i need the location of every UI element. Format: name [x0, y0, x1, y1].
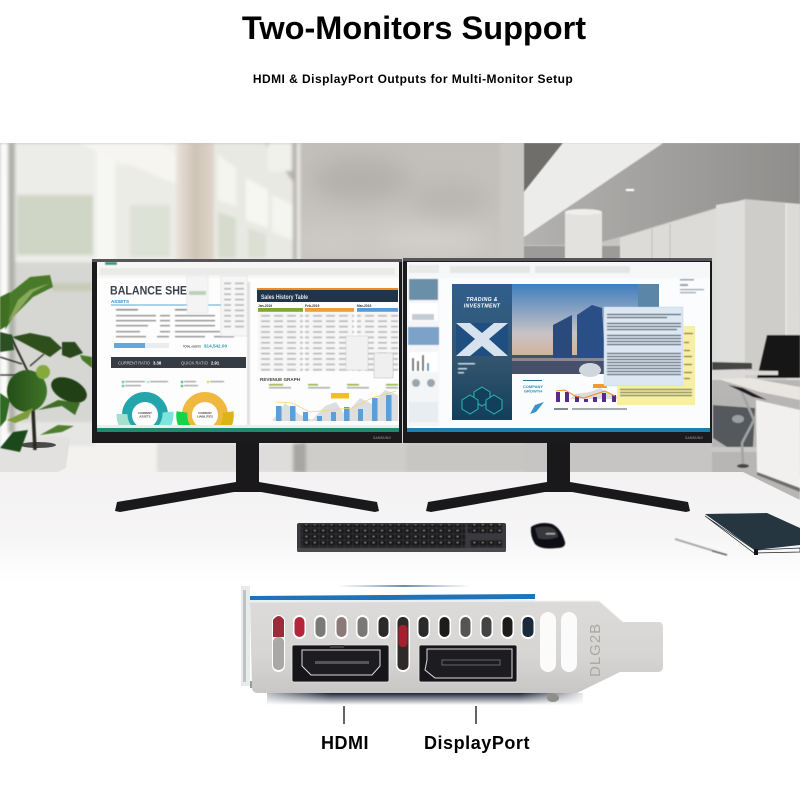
current liabilities donut: CURRENT	[198, 411, 212, 415]
current assets donut: CURRENT	[138, 411, 152, 415]
balance sheet	[110, 276, 247, 433]
current liabilities donut	[182, 397, 228, 433]
assets label: ASSETS	[111, 299, 129, 304]
back wall	[0, 143, 800, 478]
cabinets	[620, 200, 800, 400]
slide title: TRADING &	[466, 297, 498, 303]
current assets donut	[122, 397, 168, 433]
revenue labels	[269, 384, 398, 388]
company growth heading: COMPANY	[523, 384, 543, 389]
open bracket slots	[540, 612, 577, 672]
main slide: INVESTMENT	[464, 304, 501, 310]
grey desk	[712, 362, 752, 370]
city skyline photo	[512, 284, 659, 377]
balance sheet: QUICK RATIO	[181, 360, 209, 365]
bracket shadow	[267, 693, 583, 705]
sales history sheet	[257, 288, 398, 421]
cylinder column	[565, 212, 602, 260]
monitor stand right	[426, 442, 690, 512]
low ceiling	[524, 246, 620, 259]
monitor stand left	[115, 442, 379, 512]
black chair	[757, 335, 800, 378]
screw	[547, 694, 559, 702]
title: Two-Monitors Support	[242, 10, 586, 46]
speaker notes pane	[680, 279, 704, 293]
soffit	[524, 143, 663, 237]
balance rows	[116, 309, 234, 337]
graphics card bracket	[241, 585, 663, 705]
total assets: TOTAL ASSETS	[183, 344, 201, 348]
status bar left	[97, 428, 399, 432]
silver pen	[675, 539, 727, 555]
main slide: GROWTH	[524, 388, 542, 394]
hexagons	[462, 387, 502, 414]
potted plant	[0, 275, 92, 472]
blurred top edge	[337, 585, 471, 587]
wireless keyboard	[297, 523, 506, 552]
purple bar chart	[554, 384, 627, 410]
blue pcb edge	[250, 594, 535, 601]
yellow sticky note	[617, 326, 695, 405]
left heatsink edge	[241, 586, 250, 686]
plant stems	[0, 335, 44, 450]
status bar right	[407, 428, 710, 432]
hdmi port	[292, 645, 389, 682]
plant pot	[0, 445, 69, 472]
black notebook	[705, 513, 800, 555]
grey bin	[713, 405, 755, 447]
white cabinet	[756, 400, 800, 488]
hdmi pointer line	[343, 706, 345, 724]
slide thumbnails	[408, 279, 439, 426]
floor	[712, 380, 800, 500]
mezzanine glass	[524, 143, 563, 192]
concrete wall mottling	[316, 158, 478, 252]
current liabilities donut: LIABILITIES	[197, 414, 213, 418]
desk top	[0, 472, 800, 542]
white table top	[728, 385, 767, 400]
balance sheet: 3.38	[153, 360, 162, 365]
balance sheet: 2.91	[211, 360, 220, 365]
lights	[626, 189, 634, 191]
hdmi label: HDMI	[321, 733, 369, 753]
blue sticky note	[604, 307, 683, 386]
month labels: Jan-2019	[258, 304, 272, 308]
spreadsheet screen left	[97, 262, 399, 433]
building photo small	[456, 323, 508, 356]
stamped bracket code: DLG2B	[587, 623, 604, 677]
metal bracket plate	[250, 601, 663, 693]
subtitle: HDMI & DisplayPort Outputs for Multi-Monitor Setup	[253, 72, 573, 86]
presentation screen right	[407, 262, 710, 432]
orange rule and header	[257, 288, 398, 290]
displayport pointer line	[475, 706, 477, 724]
growth icon	[530, 402, 544, 414]
balance sheet: CURRENT RATIO	[118, 360, 151, 365]
ventilation slots	[272, 615, 535, 672]
wireless mouse	[531, 523, 565, 548]
ribbon toolbar	[97, 262, 399, 425]
sales history sheet: Sales History Table	[261, 294, 308, 301]
sheet tab bar	[97, 425, 399, 428]
table headers	[258, 308, 303, 312]
ratio banner	[111, 357, 246, 368]
legend dots	[122, 381, 224, 387]
dialog windows	[346, 336, 368, 370]
monitor frame left	[92, 259, 402, 443]
ceiling	[524, 143, 800, 245]
context menus	[187, 276, 247, 336]
brand mark: SAMSUNG	[685, 436, 703, 440]
monitor frame right	[403, 258, 712, 443]
windows on the left	[0, 143, 524, 472]
table legs	[740, 388, 754, 465]
left monitor	[92, 259, 402, 512]
revenue chart	[272, 390, 398, 421]
balance sheet heading: BALANCE SHE	[110, 284, 187, 298]
concrete column	[502, 144, 524, 200]
balance sheet: $14,542.00	[204, 344, 227, 348]
progress bar	[145, 343, 169, 348]
ribbon toolbar	[407, 262, 710, 278]
revenue heading: REVENUE GRAPH	[260, 377, 301, 382]
right monitor	[403, 258, 712, 512]
ceiling and offices on the right	[500, 143, 800, 500]
displayport port	[419, 645, 517, 682]
displayport label: DisplayPort	[424, 733, 530, 753]
brand mark: SAMSUNG	[373, 436, 391, 440]
sales history sheet: Feb-2019	[305, 304, 319, 308]
sales history sheet: Mar-2019	[357, 304, 371, 308]
slide left navy panel	[452, 284, 512, 420]
current assets donut: ASSETS	[139, 414, 151, 418]
plant leaves	[0, 275, 92, 452]
slide list	[458, 363, 475, 374]
table rows	[258, 312, 303, 371]
main slide	[452, 279, 704, 420]
office photo background	[0, 143, 800, 583]
